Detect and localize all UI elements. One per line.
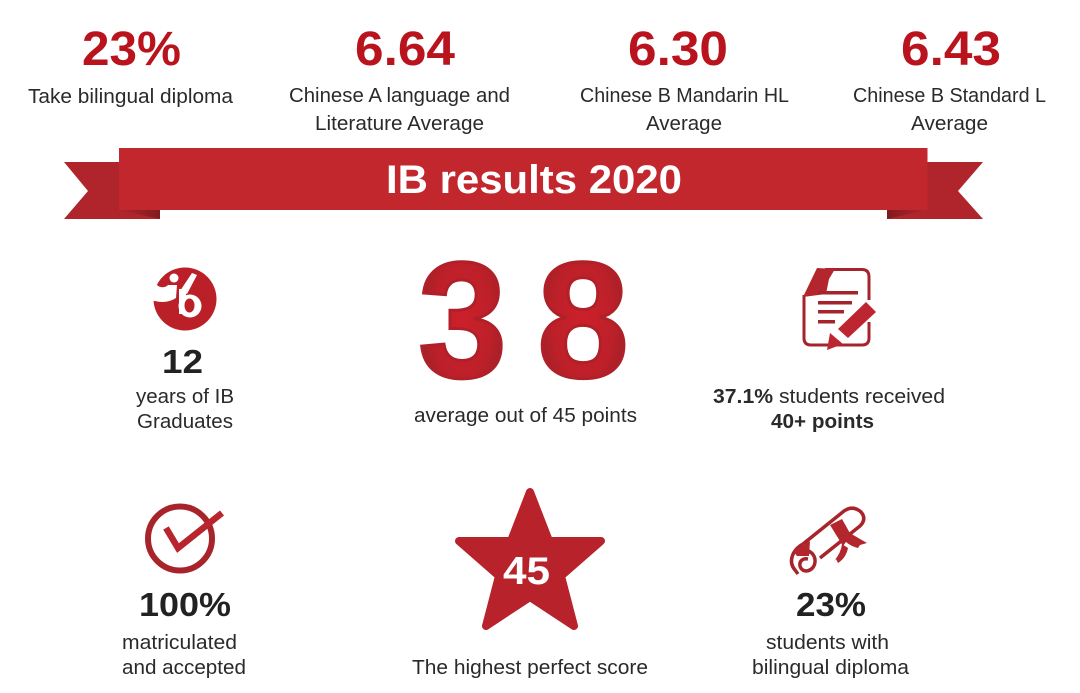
bilingual diploma block: 23% [796,586,866,623]
stat: Chinese A average [289,23,510,135]
stat: Chinese B Mandarin HL average [580,23,789,135]
stat: Chinese A average: Literature Average [315,113,484,135]
matriculated block: and accepted [122,657,246,679]
stat: Chinese B Standard L average: Average [911,113,988,135]
IB years block: Graduates [137,411,233,433]
average score block [414,228,637,427]
icon: star with 45 [459,492,601,626]
stat: Chinese B Mandarin HL average: Chinese B Mandarin HL [580,85,789,107]
icon: check mark in circle [148,506,222,570]
40+ points block: 37.1% students received [713,386,945,408]
matriculated block: matriculated [122,632,237,654]
average score block: 8 [537,228,629,412]
stat: Chinese B Standard L average: Chinese B Standard L [853,85,1046,107]
icon: diploma scroll [792,508,867,574]
banner [64,148,983,219]
40+ points block: 40+ points [771,411,874,433]
matriculated block: 100% [139,586,231,623]
IB years block [136,268,234,433]
average score block: average out of 45 points [414,405,637,427]
stat: Chinese B Mandarin HL average: 6.30 [628,23,728,76]
bilingual diploma block: students with [766,632,889,654]
average score block: 3 [418,228,507,412]
40+ points block [713,268,945,433]
stat: Chinese B Standard L average: 6.43 [901,23,1001,76]
icon: IB logo [150,268,216,330]
matriculated block [122,506,246,679]
banner: IB results 2020 [386,158,682,202]
stat: bilingual diploma [28,23,234,108]
stat: Chinese B Mandarin HL average: Average [646,113,722,135]
stat: Chinese A average: Chinese A language and [289,85,510,107]
stat: Chinese A average: 6.64 [355,23,455,76]
IB years block: years of IB [136,386,234,408]
stat: bilingual diploma: Take bilingual diploma [28,86,234,108]
stat: Chinese B Standard L average [853,23,1046,135]
bilingual diploma block [752,508,910,679]
perfect score block: The highest perfect score [412,657,648,679]
icon: document and pencil [803,268,876,350]
icon: star with 45: 45 [503,550,550,593]
stat: bilingual diploma: 23% [82,23,181,76]
bilingual diploma block: bilingual diploma [752,657,910,679]
perfect score block [412,492,648,679]
IB years block: 12 [162,343,203,380]
